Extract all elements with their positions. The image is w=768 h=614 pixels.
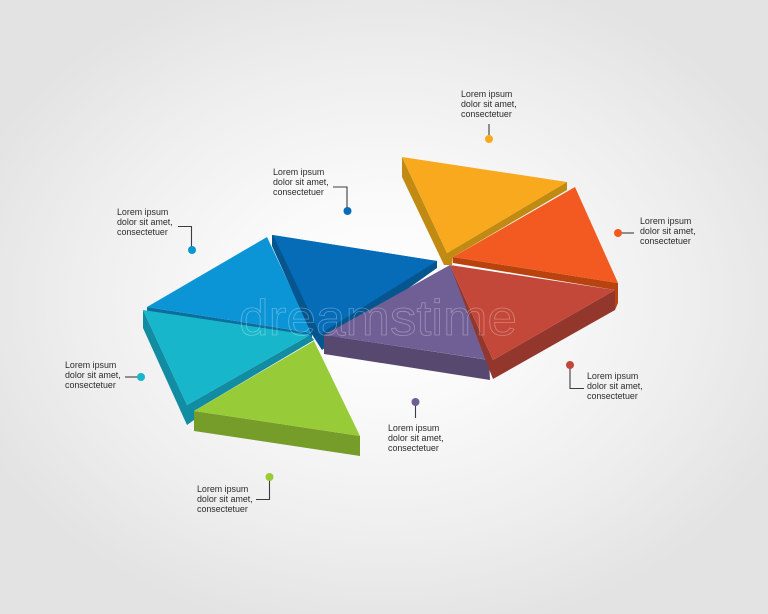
label: blue: consectetuer (117, 227, 168, 237)
label: orange: consectetuer (640, 236, 691, 246)
label: blue: Lorem ipsum (117, 207, 168, 217)
watermark: dreamstime (239, 290, 517, 346)
label: dark blue (273, 167, 352, 215)
label: blue (117, 207, 196, 254)
label: orange: dolor sit amet, (640, 226, 696, 236)
label: teal: dolor sit amet, (65, 370, 121, 380)
label: purple (388, 398, 444, 453)
label: teal: consectetuer (65, 380, 116, 390)
label: dark blue: consectetuer (273, 187, 324, 197)
label: amber: Lorem ipsum (461, 89, 512, 99)
label: orange: Lorem ipsum (640, 216, 691, 226)
label: amber: consectetuer (461, 109, 512, 119)
segment: amber triangle (402, 157, 567, 265)
label: purple: consectetuer (388, 443, 439, 453)
segment: purple triangle (324, 265, 490, 380)
label: red: dolor sit amet, (587, 381, 643, 391)
label: red (566, 361, 643, 401)
label: amber (461, 89, 517, 143)
label: green: consectetuer (197, 504, 248, 514)
label: green: Lorem ipsum (197, 484, 248, 494)
label: orange (614, 216, 696, 246)
label: blue: dolor sit amet, (117, 217, 173, 227)
label: teal: Lorem ipsum (65, 360, 116, 370)
segment: green triangle (194, 341, 360, 456)
label: red: Lorem ipsum (587, 371, 638, 381)
segment: orange triangle (453, 187, 618, 310)
label: dark blue: dolor sit amet, (273, 177, 329, 187)
segment: teal triangle (143, 310, 314, 425)
label: amber: dolor sit amet, (461, 99, 517, 109)
label: dark blue: Lorem ipsum (273, 167, 324, 177)
segment: blue triangle (147, 237, 312, 338)
segment: dark blue triangle (272, 235, 437, 350)
label: teal (65, 360, 145, 390)
segment: red triangle (450, 265, 615, 379)
label: purple: dolor sit amet, (388, 433, 444, 443)
label: green: dolor sit amet, (197, 494, 253, 504)
label: green (197, 473, 274, 514)
label: purple: Lorem ipsum (388, 423, 439, 433)
label: red: consectetuer (587, 391, 638, 401)
